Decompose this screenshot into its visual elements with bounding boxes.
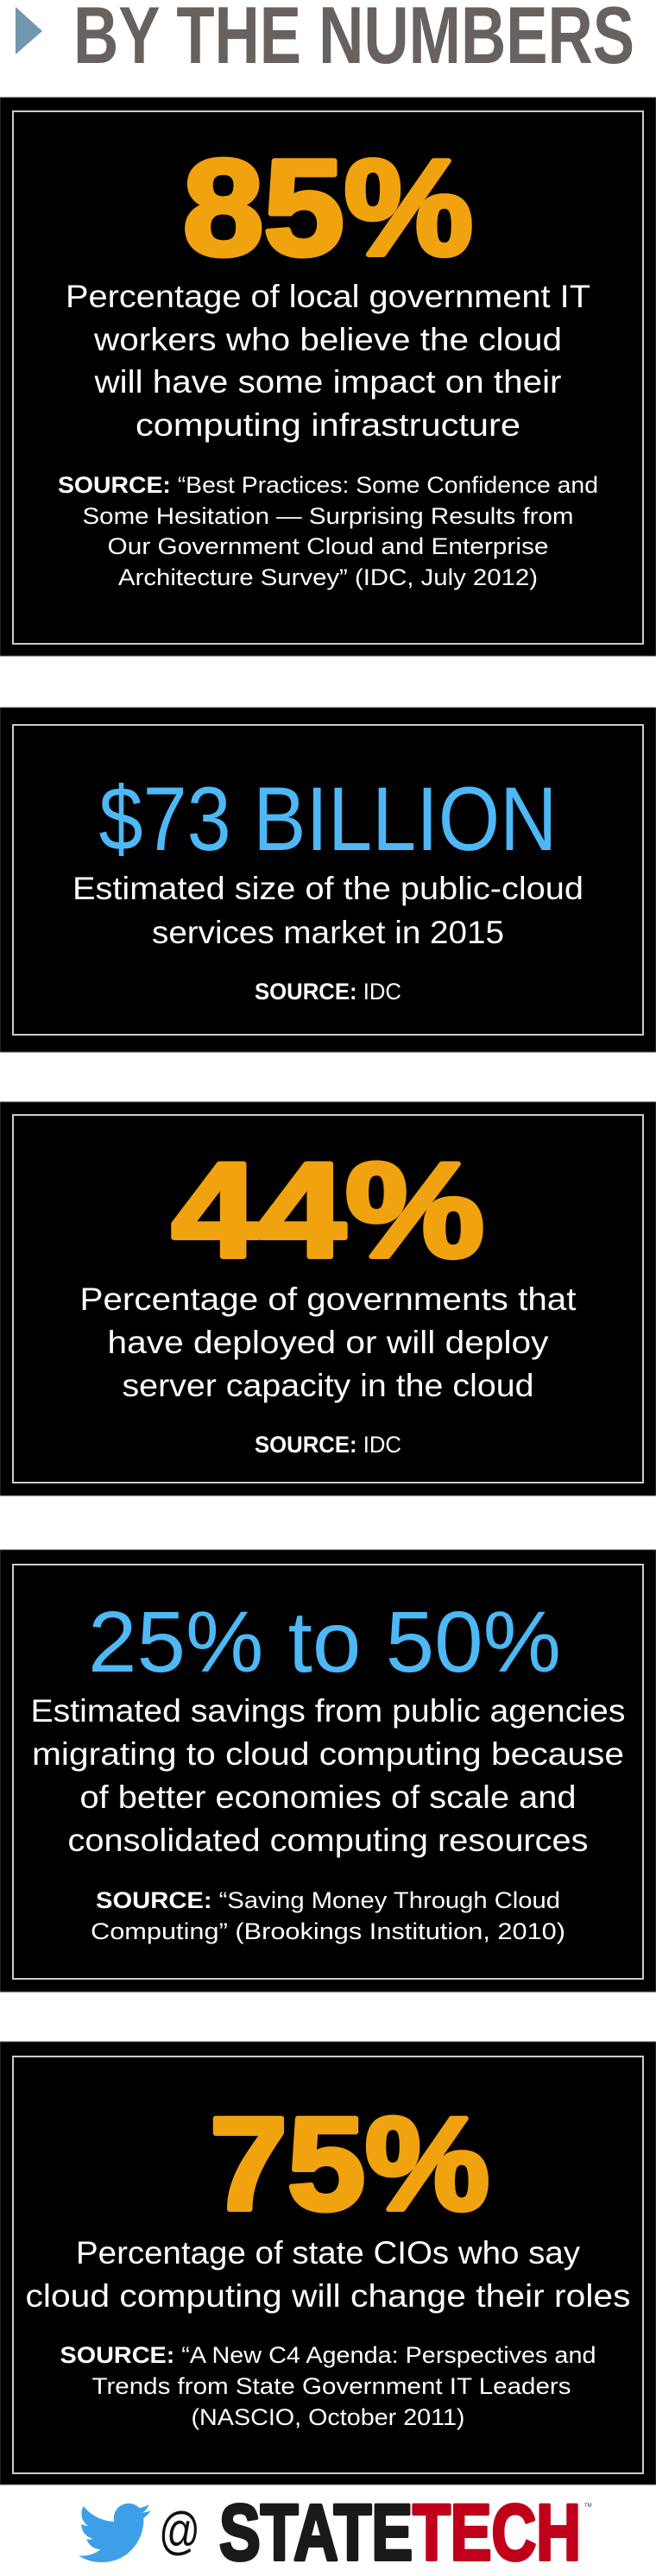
description: [26, 2235, 630, 2314]
source: Architecture Survey” (IDC, July 2012): [118, 564, 538, 590]
panel: 75%: [0, 2042, 656, 2485]
source: SOURCE: IDC: [255, 979, 401, 1005]
source: [60, 2342, 596, 2430]
description: workers who believe the cloud: [93, 322, 562, 357]
source: Our Government Cloud and Enterprise: [107, 533, 549, 559]
description: cloud computing will change their roles: [26, 2278, 630, 2314]
trademark: TM: [584, 2504, 592, 2509]
source: SOURCE: “Saving Money Through Cloud: [96, 1887, 560, 1913]
description: computing infrastructure: [136, 407, 520, 443]
description: will have some impact on their: [93, 364, 561, 400]
description: of better economies of scale and: [79, 1779, 577, 1815]
header: [16, 0, 634, 80]
description: consolidated computing resources: [67, 1823, 589, 1858]
description: Estimated savings from public agencies: [31, 1693, 625, 1729]
big number 25% to 50%: 25% to 50%: [88, 1594, 561, 1691]
source: (NASCIO, October 2011): [192, 2404, 464, 2430]
icon: header arrow: [16, 7, 42, 54]
big number 85%: 85%: [183, 132, 473, 284]
icon: twitter bird: [79, 2504, 151, 2562]
footer: twitter handle: [79, 2489, 592, 2576]
source: Computing” (Brookings Institution, 2010): [91, 1918, 565, 1944]
source: SOURCE: IDC: [255, 1432, 401, 1458]
source: SOURCE: “Best Practices: Some Confidence and: [58, 472, 598, 498]
source: SOURCE: “A New C4 Agenda: Perspectives and: [60, 2342, 596, 2368]
big number $73 BILLION: $73 BILLION: [98, 769, 558, 870]
source: Some Hesitation — Surprising Results from: [83, 503, 573, 529]
big number 75%: 75%: [210, 2090, 489, 2238]
description: Percentage of state CIOs who say: [76, 2235, 581, 2271]
description: Percentage of governments that: [79, 1282, 577, 1317]
panel: 44%: [0, 1102, 656, 1496]
description: services market in 2015: [152, 915, 504, 950]
source: Trends from State Government IT Leaders: [91, 2373, 571, 2399]
description: Estimated size of the public-cloud: [73, 871, 583, 906]
description: [79, 1282, 577, 1403]
description: server capacity in the cloud: [123, 1368, 533, 1403]
description: have deployed or will deploy: [107, 1325, 549, 1360]
source: [58, 472, 598, 590]
source: [91, 1887, 565, 1944]
panel: $73 billion: [0, 708, 656, 1052]
logo STATETECH: STATETECH: [219, 2489, 581, 2576]
panel: 85%: [0, 98, 656, 656]
at sign: @: [159, 2502, 200, 2560]
description: migrating to cloud computing because: [32, 1736, 624, 1772]
big number 44%: 44%: [172, 1136, 484, 1286]
panel: 25% to 50%: [0, 1550, 656, 1992]
description: Percentage of local government IT: [66, 279, 590, 314]
description: [73, 871, 583, 950]
description: [31, 1693, 625, 1858]
description: [66, 279, 590, 443]
